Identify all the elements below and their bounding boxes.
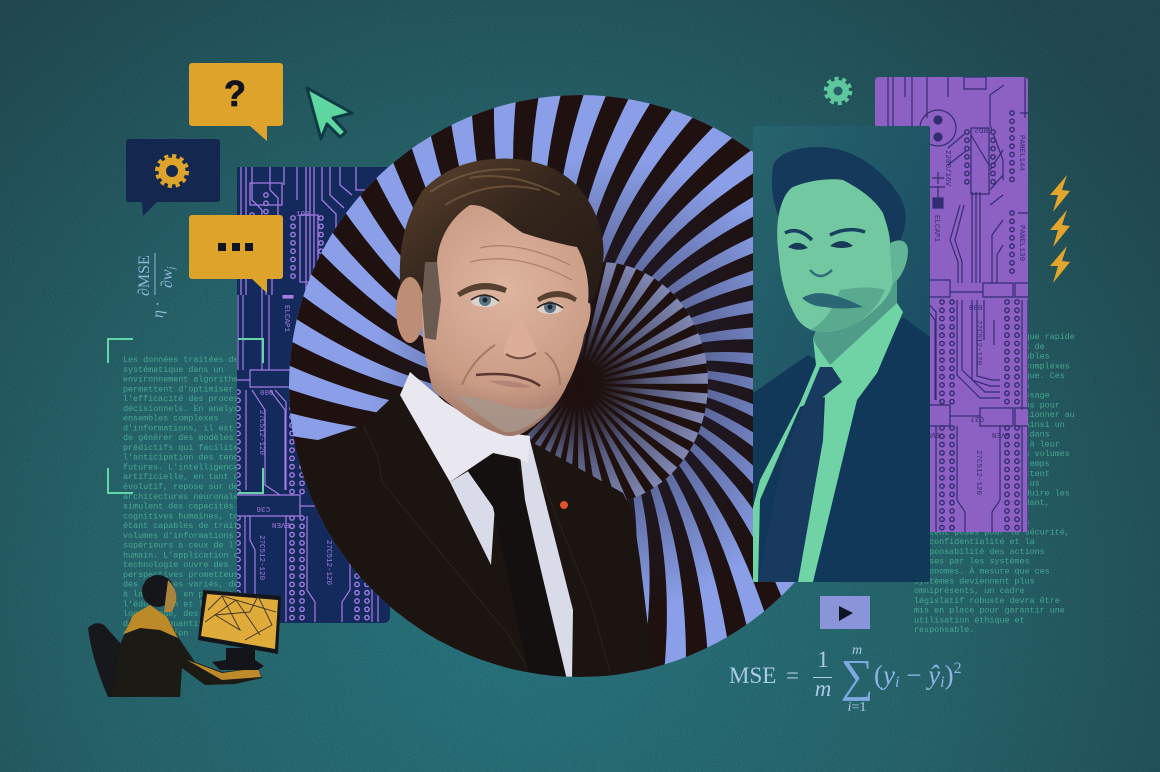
text block: left French paragraph: technologie ouvre des (123, 560, 229, 570)
panel: right circuit board (875, 77, 1040, 533)
text block: left French paragraph: d'informations, il est possible (123, 423, 279, 433)
face (777, 179, 893, 332)
formula: mean squared error: MSE (729, 663, 776, 688)
text block: right French paragraph: d'étudier des réseaux complexes (914, 361, 1070, 371)
face (422, 205, 591, 436)
portrait panel: man in teal duotone (753, 126, 930, 582)
panel: left circuit board: 100 (296, 211, 310, 219)
bubble: gear (126, 139, 220, 216)
text block: left French paragraph: supérieurs à ceux de l'esprit (123, 541, 269, 551)
text block: right French paragraph: utilisation éthique et (914, 615, 1025, 625)
text block: right French paragraph: responsabilité des actions (914, 547, 1045, 557)
text block: left French paragraph: cognitives humaines, tout en (123, 511, 264, 521)
chair (88, 623, 135, 697)
formula: mean squared error: = (786, 663, 799, 688)
formula: rotated gradient: ∂MSE (136, 255, 153, 296)
icon: gear mint (826, 78, 850, 104)
text block: left French paragraph: simulent des capacités (123, 502, 234, 512)
formula: mean squared error: m (815, 676, 831, 701)
text block: left French paragraph: décisionnels. En analysant des (123, 404, 274, 414)
text block: right French paragraph: algorithmes d'apprentissage (914, 391, 1050, 401)
sideburn (422, 262, 441, 340)
text block: left French paragraph: prédictifs qui facilitent (123, 443, 249, 453)
text block: right French paragraph: permet aux modèles capables (914, 352, 1050, 362)
text block: left French paragraph: artificielle, en tant que système (123, 472, 289, 482)
bracket frame (108, 339, 263, 493)
text block: left French paragraph: à la santé, en passant par (123, 589, 254, 599)
hair (400, 159, 604, 315)
lapels (363, 425, 610, 672)
text block: left French paragraph: est aussi (123, 638, 168, 648)
nose (810, 270, 832, 276)
text block: left French paragraph: primordiale (123, 648, 178, 658)
hair highlights (430, 169, 560, 205)
text block: left French paragraph: où la gestion (123, 629, 188, 639)
icon: play button (820, 596, 870, 629)
illustration: person at computer (88, 575, 281, 697)
jacket (753, 317, 930, 582)
eyebrows (785, 230, 865, 240)
text block: left French paragraph: l'efficacité des processus (123, 394, 254, 404)
text block: left French paragraph: environnement algorithmique (123, 375, 259, 385)
neck (813, 280, 897, 365)
forehead wrinkles (470, 246, 572, 280)
text block: right French paragraph: législatif robuste devra être (914, 596, 1060, 606)
jacket (285, 385, 655, 685)
text block: right French paragraph: outils utilisent divers (914, 381, 1030, 391)
stubble (455, 395, 552, 432)
monitor stand (212, 648, 264, 670)
text block: right French paragraph: et efficace des données de (914, 342, 1045, 352)
tie (804, 367, 842, 475)
text block: right French paragraph: responsable. (914, 625, 974, 635)
formula: mean squared error: 2 (954, 660, 962, 677)
text block: left French paragraph: permettent d'optimiser (123, 384, 234, 394)
bubble: question: ? (224, 73, 246, 114)
formula: rotated gradient: j (166, 266, 177, 271)
spiral disc (289, 95, 795, 677)
text block: left French paragraph: étant capables de traiter des (123, 521, 269, 531)
text block: right French paragraph: autonomes. À mesure que ces (914, 565, 1050, 576)
text block: left French paragraph: logistique, des (123, 609, 198, 619)
text block: left French paragraph: volumes d'informations (123, 531, 234, 541)
bubble: question (189, 63, 283, 141)
text block: left French paragraph: domaines quantitatifs (123, 619, 229, 629)
text block: right French paragraph: profond et des processus pour (914, 400, 1060, 410)
lapel pin (560, 501, 568, 509)
text block: right French paragraph: très courts. Ils permettent (914, 469, 1050, 479)
formula: mean squared error: ŷ (925, 660, 945, 691)
eyes (471, 294, 563, 314)
text block: left French paragraph: futures. L'intelligence (123, 462, 239, 472)
formula: mean squared error: i=1 (848, 700, 866, 715)
body (112, 605, 262, 697)
tie (467, 455, 567, 680)
text block: right French paragraph: des résultats finaux. Ainsi un (914, 420, 1065, 430)
shoulder highlights (124, 605, 261, 680)
formula: mean squared error: ∑ (841, 650, 873, 701)
text block: left French paragraph: évolutif, repose sur des (123, 482, 244, 492)
head (142, 575, 174, 607)
formula: mean squared error (729, 643, 962, 715)
text block: right French paragraph: systèmes deviennent plus (914, 576, 1035, 586)
formula: mean squared error: − (899, 660, 928, 690)
nose (503, 334, 537, 357)
icon: lightning bolts (1050, 175, 1070, 283)
monitor (198, 590, 281, 654)
text block: right French paragraph: il reste (914, 508, 954, 518)
formula: mean squared error: i (895, 674, 899, 691)
ear (890, 240, 908, 283)
eyes (788, 241, 853, 250)
text block: left French paragraph: des domaines variés, de (123, 580, 239, 590)
cheek creases (462, 345, 560, 385)
hair (772, 147, 906, 243)
text block: left French paragraph: perspectives prometteuses dans (123, 570, 274, 580)
cheek shading (810, 288, 885, 332)
text block: right French paragraph: Le traitement automatique rapide (914, 332, 1075, 342)
text block: right French paragraph: évolution et traite des volumes (914, 449, 1070, 459)
formula: rotated gradient: η · (150, 302, 167, 318)
formula: mean squared error: 1 (817, 647, 829, 672)
shirt (753, 303, 903, 582)
icon: cursor arrow (307, 88, 352, 139)
text block: right French paragraph: vite, autant que de réduire les (914, 488, 1070, 498)
text block: right French paragraph: d'agir toujours bien plus (914, 479, 1040, 489)
text block: left French paragraph: l'éducation et la (123, 599, 208, 609)
formula: mean squared error: (y (874, 660, 895, 690)
text block: right French paragraph: continuellement perfectionner au (914, 410, 1075, 420)
shirt (450, 440, 573, 680)
text block: left French paragraph: ensembles complexes (123, 414, 218, 424)
formula: mean squared error: m (852, 643, 862, 658)
formula: rotated gradient: ∂w (159, 269, 176, 288)
collar (400, 372, 530, 482)
bubble: ellipsis (189, 215, 283, 293)
mouth (802, 293, 863, 308)
text block: left French paragraph: systématique dans un (123, 365, 224, 375)
text block: right French paragraph: restent posés pour la sécurité, (914, 527, 1070, 537)
text block: left French paragraph: de générer des modèles (123, 433, 234, 443)
mouth (476, 374, 540, 386)
text block: right French paragraph: mis en place pour garantir une (914, 606, 1065, 616)
text block: right French paragraph: la confidentialité et la (914, 537, 1035, 547)
text block: right French paragraph: d'une façon assez logique. Ces (914, 371, 1065, 381)
panel: left circuit board (230, 167, 390, 623)
text block: right French paragraph: prises par les systèmes (914, 557, 1030, 567)
text block: left French paragraph: architectures neuronales qui (123, 492, 264, 502)
text block: right French paragraph: insoupçonnés dans des temps (914, 459, 1050, 469)
portrait: man in dark suit (285, 159, 655, 685)
formula: rotated gradient (136, 253, 177, 318)
text block: right French paragraph: omniprésents, un cadre (914, 586, 1025, 596)
formula: mean squared error: i (940, 674, 945, 691)
eyebrows (457, 283, 577, 302)
text block: left French paragraph: l'anticipation des tendances (123, 453, 264, 463)
text block: right French paragraph: les coûts réels. Cependant, (914, 498, 1050, 508)
text block: left French paragraph: humain. L'application de cette (123, 550, 274, 560)
text block: right French paragraph: modèle peut être placé dans (914, 430, 1050, 440)
text block: right French paragraph: un milieu qui s'adapte à leur (914, 439, 1060, 449)
formula: mean squared error: ) (945, 660, 954, 690)
text block: right French paragraph: des défis sont notables (914, 518, 1030, 528)
text block: left French paragraph: Les données traitées de manière (123, 355, 279, 365)
ear left (396, 277, 424, 343)
